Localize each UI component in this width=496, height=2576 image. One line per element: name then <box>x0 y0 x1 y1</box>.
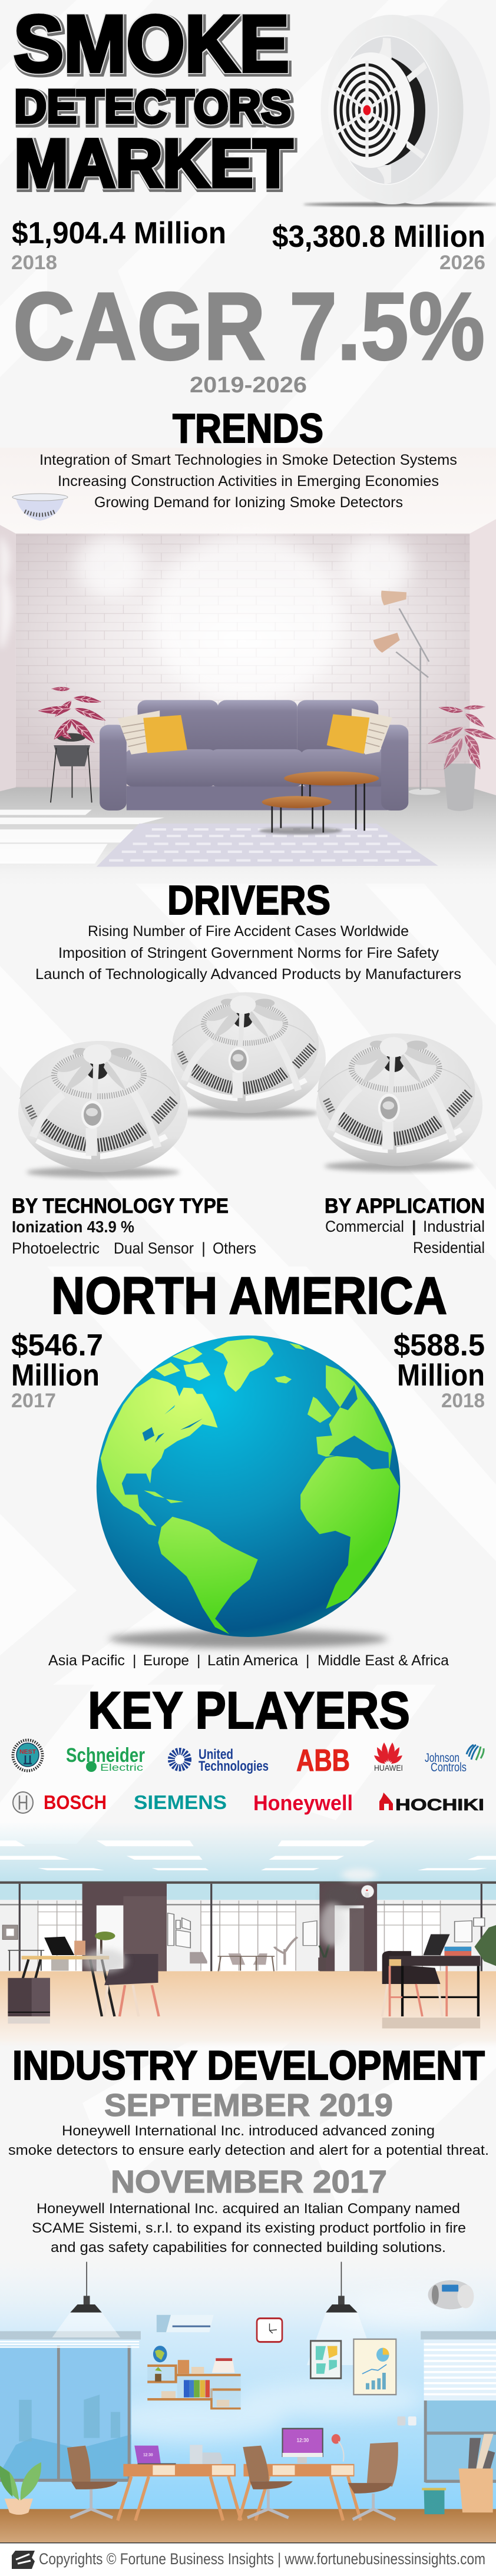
rug <box>97 824 438 867</box>
icon: globe <box>97 1335 400 1648</box>
logos: row one <box>13 1740 484 1778</box>
stat: 2017 value: $546.7 <box>11 1328 103 1363</box>
right window <box>421 2331 496 2482</box>
icon: picture frame <box>310 2341 341 2378</box>
logo: Honeywell: Honeywell <box>253 1791 353 1815</box>
logo: Hochiki: HOCHIKI <box>395 1795 484 1814</box>
stat: 2018 regional value: Million <box>397 1358 485 1393</box>
heading: drivers: DRIVERS <box>167 877 330 923</box>
regions list: Asia Pacific <box>48 1652 125 1669</box>
icon: carbon monoxide alarm <box>428 2280 474 2309</box>
segment: by technology type: Ionization 43.9 % <box>12 1218 134 1236</box>
coffee tables <box>259 771 379 834</box>
back wall with bricks <box>16 534 469 788</box>
icon: left plant <box>38 687 108 802</box>
heading: north america: NORTH AMERICA <box>51 1266 447 1325</box>
regions list: Middle East & Africa <box>318 1652 449 1669</box>
drivers list <box>35 923 461 983</box>
stat: 2018 value: $1,904.4 Million <box>12 216 226 250</box>
development: September 2019: Honeywell International Inc. introduced advanced zoning <box>62 2123 435 2139</box>
segment: by application: BY APPLICATION <box>325 1195 485 1218</box>
icon: Fortune Business Insights logo <box>12 2551 35 2569</box>
logo: Johnson Controls <box>425 1745 484 1774</box>
segment: by technology type: Photoelectric <box>12 1239 100 1257</box>
icon: three ceiling smoke detectors <box>18 992 482 1178</box>
segment: by technology type: | <box>201 1239 206 1257</box>
office chairs <box>67 2442 398 2519</box>
logo: Hochiki <box>379 1793 484 1814</box>
logo: United Technologies: United <box>199 1747 233 1762</box>
desk items: 12:30 <box>143 2453 153 2457</box>
logo: NEST <box>13 1740 42 1771</box>
stat: 2018 value <box>11 216 226 274</box>
drivers list: Rising Number of Fire Accident Cases Worldwide <box>88 923 409 940</box>
icon: floor lamp <box>373 591 441 795</box>
regions list: | <box>306 1652 310 1669</box>
panel: modern office scene <box>0 2258 496 2543</box>
floor <box>0 786 496 891</box>
segment: by technology type <box>12 1195 256 1257</box>
drivers list: Imposition of Stringent Government Norms for Fire Safety <box>58 945 439 961</box>
stat: 2017 value <box>11 1328 103 1412</box>
regions list: | <box>133 1652 137 1669</box>
segment: by application: Residential <box>413 1239 485 1256</box>
trends list: Growing Demand for Ionizing Smoke Detectors <box>94 494 403 511</box>
logo: Schneider Electric: Schneider <box>66 1744 145 1767</box>
logo: Johnson Controls: Johnson <box>425 1751 459 1765</box>
trends list: Integration of Smart Technologies in Smoke Detection Systems <box>39 452 457 468</box>
sofa <box>100 700 408 811</box>
icon: ceiling smoke detector <box>12 494 68 521</box>
logo: Huawei <box>374 1742 403 1773</box>
shelves <box>147 2346 241 2409</box>
ceiling <box>0 448 496 534</box>
segment: by technology type: Others <box>213 1239 256 1257</box>
right desk and chair <box>382 1925 496 2028</box>
main title: MARKET <box>14 125 293 201</box>
stat: 2026 value: 2026 <box>439 252 485 274</box>
logo: Johnson Controls: Controls <box>431 1761 467 1774</box>
icon: smoke detector <box>303 15 496 206</box>
heading: trends: TRENDS <box>173 405 323 451</box>
segment: by technology type: Dual Sensor <box>114 1239 194 1257</box>
icon: potted plant <box>0 2462 41 2515</box>
trends list <box>39 452 457 511</box>
icon: right plant <box>426 705 496 811</box>
regions list: | <box>197 1652 200 1669</box>
left desk and chair <box>8 1932 159 2023</box>
development: November 2017: NOVEMBER 2017 <box>111 2164 387 2200</box>
main title <box>14 0 293 201</box>
footer <box>0 2542 496 2576</box>
back wall and windows <box>0 1881 496 1972</box>
stat: 2026 value: $3,380.8 Million <box>272 220 485 254</box>
regions list: Latin America <box>207 1652 298 1669</box>
stat: 2017 value: Million <box>11 1358 100 1393</box>
mid tables and chairs <box>190 1937 329 1971</box>
logo: United Technologies: Technologies <box>199 1758 269 1774</box>
development: September 2019: SEPTEMBER 2019 <box>104 2088 393 2123</box>
main title: DETECTORS <box>14 80 291 133</box>
segment: by technology type: BY TECHNOLOGY TYPE <box>12 1195 229 1218</box>
regions list <box>48 1652 449 1669</box>
wall frames <box>168 1913 485 1948</box>
icon: wall smoke detector <box>361 1885 374 1897</box>
logo: ABB: ABB <box>296 1744 350 1778</box>
development: November 2017: and gas safety capabilities for connected building solutions. <box>51 2240 446 2256</box>
development: November 2017: Honeywell International Inc. acquired an Italian Company named <box>37 2201 460 2217</box>
floor <box>0 2509 496 2543</box>
stat: 2018 regional value: $588.5 <box>394 1328 485 1363</box>
icon: air conditioner <box>157 2315 213 2332</box>
sky wall <box>0 2258 496 2511</box>
logo: Bosch: BOSCH <box>44 1791 107 1813</box>
CAGR period: 2019-2026 <box>190 373 307 398</box>
segment: by application <box>325 1195 485 1256</box>
logo: Bosch <box>13 1791 107 1813</box>
development: November 2017 <box>32 2164 466 2256</box>
left picture and shelf <box>2 1925 69 1971</box>
stat: 2017 value: 2017 <box>11 1390 56 1412</box>
logo: Siemens: SIEMENS <box>134 1791 227 1813</box>
floor <box>0 1971 496 2048</box>
heading: key players: KEY PLAYERS <box>88 1681 410 1740</box>
logo: NEST: NEST <box>19 1749 36 1755</box>
pillars <box>82 1883 377 1972</box>
left window <box>0 2331 141 2481</box>
stat: 2018 regional value: 2018 <box>441 1390 485 1412</box>
segment: by application: | <box>412 1218 416 1235</box>
regions list: Europe <box>143 1652 189 1669</box>
trends list: Increasing Construction Activities in Emerging Economies <box>58 473 439 490</box>
stat: 2018 regional value <box>394 1328 485 1412</box>
logo: Schneider Electric <box>66 1744 145 1773</box>
bin and roll holder <box>397 2416 495 2514</box>
logos: row two <box>13 1791 484 1815</box>
pendant lamps <box>52 2262 376 2365</box>
development: November 2017: SCAME Sistemi, s.r.l. to expand its existing product portfolio in fire <box>32 2220 466 2236</box>
smoke <box>82 1869 376 1973</box>
segment: by application: Industrial <box>423 1218 485 1235</box>
development: September 2019: smoke detectors to ensure early detection and alert for a potential threat. <box>8 2142 489 2158</box>
desk items <box>134 2429 344 2464</box>
stat: 2018 value: 2018 <box>11 252 57 274</box>
icon: chart poster <box>353 2339 396 2395</box>
pillows <box>118 709 392 755</box>
logo: Schneider Electric: Electric <box>100 1762 144 1773</box>
development: September 2019 <box>8 2088 489 2158</box>
desks <box>118 2464 361 2521</box>
segment: by application: Commercial <box>325 1218 404 1235</box>
ceiling <box>0 1822 496 1882</box>
desk items: 12:30 <box>297 2437 309 2443</box>
panel: office scene with smoke <box>0 1822 496 2048</box>
icon: wall clock <box>257 2319 282 2342</box>
logo: United Technologies <box>171 1747 269 1774</box>
panel: living room scene <box>0 448 496 891</box>
logo: Huawei: HUAWEI <box>374 1763 403 1773</box>
stat: 2026 value <box>272 220 485 274</box>
main title: SMOKE <box>14 0 289 88</box>
drivers list: Launch of Technologically Advanced Products by Manufacturers <box>35 966 461 983</box>
